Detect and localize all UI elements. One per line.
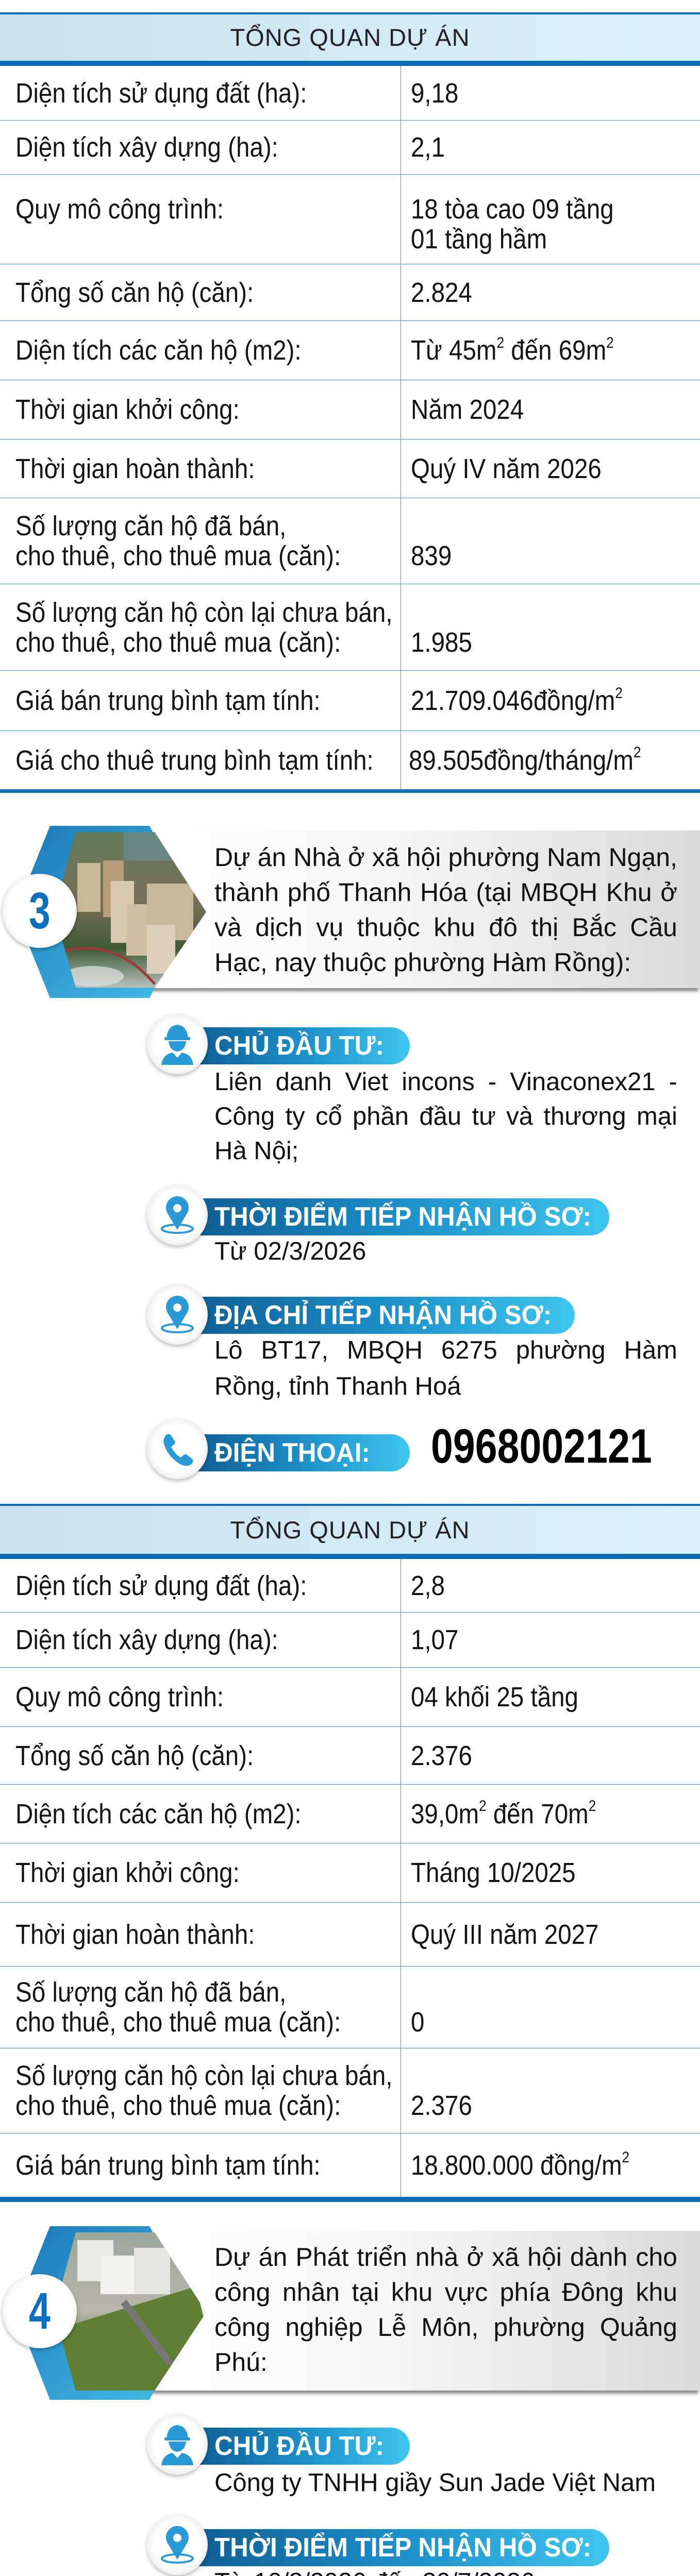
item: investor 3: Liên danh Viet incons - Vinaconex21 -: [214, 1068, 677, 1096]
table: project overview 1: Giá cho thuê trung bình tạm tính:: [15, 745, 374, 776]
table: project overview 3: Số lượng căn hộ còn lại chưa bán,: [15, 2060, 392, 2091]
table: project overview 1: Số lượng căn hộ còn lại chưa bán,: [15, 597, 392, 628]
table: project overview 3: cho thuê, cho thuê mua (căn):: [15, 2007, 341, 2038]
item: submission time 4: THỜI ĐIỂM TIẾP NHẬN HỒ SƠ:: [214, 2533, 591, 2563]
table header: [0, 1504, 700, 1559]
table: project overview 1: 21.709.046đồng/m2: [411, 685, 623, 716]
item: investor 4: Công ty TNHH giầy Sun Jade Việt Nam: [214, 2469, 656, 2497]
table: project overview 1: Tổng số căn hộ (căn):: [15, 277, 254, 308]
item: investor 4: CHỦ ĐẦU TƯ:: [214, 2431, 384, 2461]
image hexagon 3: [29, 826, 206, 998]
description: project 3: Hạc, nay thuộc phường Hàm Rồng):: [214, 948, 631, 977]
table: project overview 1: 18 tòa cao 09 tầng: [411, 194, 614, 225]
item: submission address 3: Rồng, tỉnh Thanh Hoá: [214, 1372, 461, 1400]
description: project 3: thành phố Thanh Hóa (tại MBQH Khu ở: [214, 878, 677, 907]
table: project overview 1: 2.824: [411, 277, 472, 308]
table: project overview 3: 04 khối 25 tầng: [411, 1682, 578, 1713]
table: project overview 1: cho thuê, cho thuê mua (căn):: [15, 626, 341, 657]
description: project 4: Phú:: [214, 2348, 268, 2377]
table header: TỔNG QUAN DỰ ÁN: [230, 1516, 470, 1544]
table: project overview 3: 39,0m2 đến 70m2: [411, 1798, 596, 1829]
table: project overview 1: 01 tầng hầm: [411, 224, 547, 255]
item: submission time 3: Từ 02/3/2026: [214, 1238, 366, 1265]
item: phone 3: ĐIỆN THOẠI:: [214, 1438, 370, 1468]
item: submission address 3: [145, 1284, 677, 1400]
table: project overview 1: Diện tích sử dụng đất (ha):: [15, 77, 307, 108]
table: project overview 1: 2,1: [411, 132, 445, 163]
table: project overview 1: cho thuê, cho thuê mua (căn):: [15, 540, 341, 571]
item: submission address 3: Lô BT17, MBQH 6275 phường Hàm: [214, 1336, 677, 1364]
item: investor 3: [145, 1013, 677, 1165]
icon: worker: [147, 1013, 208, 1074]
description: project 3: và dịch vụ thuộc khu đô thị Bắc Cầu: [214, 913, 677, 942]
item: investor 4: [145, 2414, 656, 2497]
item: submission time 3: THỜI ĐIỂM TIẾP NHẬN HỒ SƠ:: [214, 1202, 591, 1232]
description: project 4: công nghiệp Lễ Môn, phường Quảng: [214, 2313, 677, 2342]
banner: project 4: [0, 2226, 700, 2400]
table: project overview 1: Diện tích xây dựng (ha):: [15, 132, 278, 163]
item: investor 3: Hà Nội;: [214, 1137, 298, 1165]
table: project overview 1: Năm 2024: [411, 394, 524, 425]
table: project overview 1: Diện tích các căn hộ (m2):: [15, 335, 302, 366]
item: investor 3: CHỦ ĐẦU TƯ:: [214, 1031, 384, 1061]
table: project overview 3: 2,8: [411, 1570, 445, 1601]
table: project overview 3: Diện tích xây dựng (ha):: [15, 1624, 278, 1655]
table: project overview 1: 1.985: [411, 626, 472, 657]
table: project overview 1: Số lượng căn hộ đã bán,: [15, 511, 286, 541]
table: project overview 3: [0, 1504, 700, 2202]
number badge 3: 3: [29, 882, 51, 940]
item: submission time 3: [145, 1184, 609, 1265]
item: phone 3: [145, 1418, 652, 1483]
table: project overview 1: Thời gian hoàn thành:: [15, 453, 255, 484]
icon: location pin: [147, 2514, 208, 2575]
table: project overview 3: cho thuê, cho thuê mua (căn):: [15, 2090, 341, 2121]
number badge 4: [3, 2274, 77, 2348]
table: project overview 1: Từ 45m2 đến 69m2: [411, 334, 614, 366]
table: project overview 1: 839: [411, 540, 452, 571]
description: project 3: [214, 843, 677, 977]
description: project 4: Dự án Phát triển nhà ở xã hội dành cho: [214, 2243, 677, 2272]
item: submission address 3: ĐỊA CHỈ TIẾP NHẬN HỒ SƠ:: [214, 1300, 552, 1330]
table: project overview 1: 89.505đồng/tháng/m2: [409, 744, 641, 776]
table: project overview 3: 18.800.000 đồng/m2: [411, 2149, 629, 2180]
image hexagon 4: [29, 2226, 206, 2400]
table: project overview 3: Quý III năm 2027: [411, 1919, 599, 1950]
number badge 3: [3, 874, 77, 948]
item: phone 3: 0968002121: [431, 1419, 652, 1473]
table: project overview 1: Thời gian khởi công:: [15, 394, 240, 425]
description: project 4: [214, 2243, 677, 2377]
table: project overview 3: 2.376: [411, 2090, 472, 2121]
table: project overview 3: 1,07: [411, 1624, 458, 1655]
table: project overview 3: Tổng số căn hộ (căn):: [15, 1740, 254, 1771]
table: project overview 3: Diện tích các căn hộ (m2):: [15, 1798, 302, 1829]
icon: location pin: [147, 1184, 208, 1245]
table: project overview 3: Quy mô công trình:: [15, 1682, 224, 1713]
table: project overview 3: Tháng 10/2025: [411, 1857, 576, 1888]
table: project overview 3: Thời gian khởi công:: [15, 1857, 240, 1888]
icon: location pin: [147, 1284, 208, 1345]
table: project overview 3: Thời gian hoàn thành:: [15, 1919, 255, 1950]
table header: TỔNG QUAN DỰ ÁN: [230, 24, 470, 51]
table: project overview 1: [0, 12, 700, 793]
table: project overview 3: Giá bán trung bình tạm tính:: [15, 2149, 321, 2180]
table: project overview 1: 9,18: [411, 77, 458, 108]
description: project 4: công nhân tại khu vực phía Đông khu: [214, 2278, 677, 2307]
table: project overview 3: 2.376: [411, 1740, 472, 1771]
table: project overview 1: Quý IV năm 2026: [411, 453, 602, 484]
icon: phone: [147, 1418, 208, 1479]
description: project 3: Dự án Nhà ở xã hội phường Nam Ngạn,: [214, 843, 677, 872]
table header: [0, 12, 700, 66]
table: project overview 3: Số lượng căn hộ đã bán,: [15, 1977, 286, 2008]
number badge 4: 4: [29, 2282, 51, 2340]
table: project overview 3: Diện tích sử dụng đất (ha):: [15, 1570, 307, 1601]
item: submission time 4: [145, 2514, 609, 2576]
item: investor 3: Công ty cổ phần đầu tư và thương mại: [214, 1103, 677, 1130]
icon: worker: [147, 2414, 208, 2475]
table: project overview 1: Giá bán trung bình tạm tính:: [15, 685, 321, 716]
banner: project 3: [0, 826, 700, 998]
table: project overview 1: Quy mô công trình:: [15, 194, 224, 225]
table: project overview 3: 0: [411, 2007, 424, 2038]
